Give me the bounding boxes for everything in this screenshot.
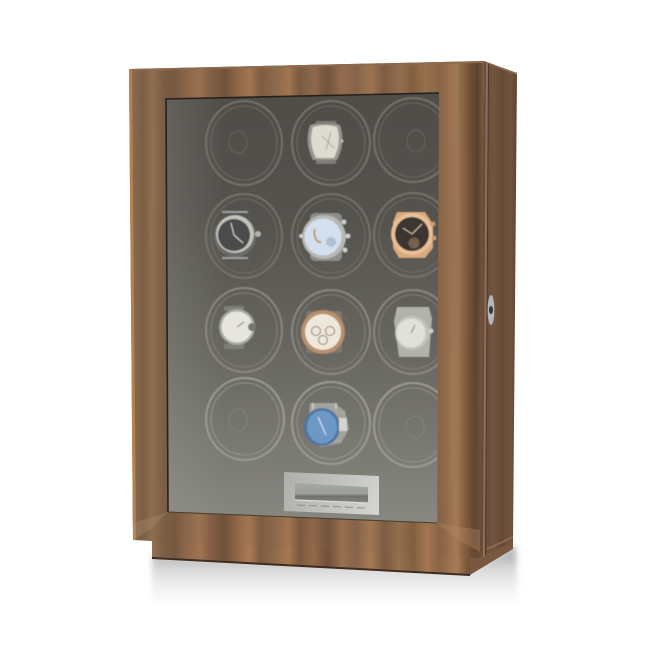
watches [214, 121, 436, 447]
cabinet [129, 61, 517, 576]
watch: rose gold dark dial [391, 212, 436, 258]
watch: light blue chronograph [299, 213, 350, 261]
winder rings [206, 98, 452, 467]
row 3 rings [206, 288, 452, 374]
plinth base [152, 540, 513, 576]
digital control panel [284, 472, 379, 515]
wooden front frame [129, 61, 484, 558]
row 1 rings [206, 98, 452, 185]
empty spindle hubs [229, 130, 425, 438]
watch: dark dial steel diver [214, 211, 261, 259]
watch: white dial silver round [219, 306, 256, 349]
watch: tonneau white dial [308, 121, 344, 164]
row 2 rings [206, 193, 452, 278]
watch: steel bracelet [394, 307, 434, 357]
side panel [478, 61, 517, 558]
glass door [166, 93, 452, 523]
floor reflection shadow [152, 545, 518, 606]
watch: rose gold chronograph [301, 310, 350, 354]
lock on side [488, 295, 494, 325]
watch: blue dial [304, 403, 349, 447]
row 4 rings [206, 378, 452, 467]
